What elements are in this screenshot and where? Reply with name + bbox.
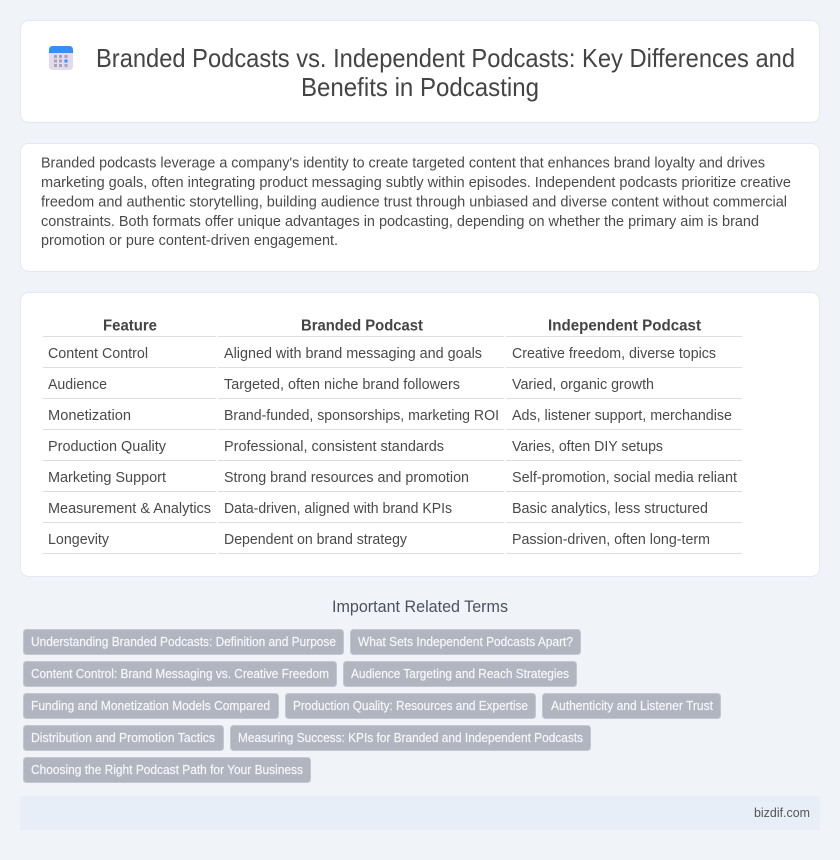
table row: monetization: Monetization xyxy=(48,408,131,424)
table row: content control: Content Control xyxy=(48,346,148,362)
tag: authenticity xyxy=(542,694,720,718)
table row: production quality: Professional, consistent standards xyxy=(224,439,444,455)
table row: production quality: Varies, often DIY setups xyxy=(512,439,663,455)
table row: content control: Creative freedom, diverse topics xyxy=(512,346,716,362)
table row: measurement and analytics: Measurement & Analytics xyxy=(48,501,211,517)
table row: longevity: Longevity xyxy=(48,532,110,548)
panel: title header xyxy=(20,20,820,122)
table row: measurement and analytics xyxy=(48,501,708,517)
tag: distribution xyxy=(24,726,224,750)
title: Benefits in Podcasting xyxy=(301,74,539,102)
footer xyxy=(20,796,820,830)
tag: independent podcasts: What Sets Independent Podcasts Apart? xyxy=(358,634,573,649)
tag: choosing the right path xyxy=(24,758,310,782)
text block: introduction paragraph: promotion or pure content-driven engagement. xyxy=(41,233,338,249)
text block: introduction paragraph: constraints. Both formats offer unique advantages in podcasting, depending on whether the primary aim is brand xyxy=(41,214,759,230)
table row: measurement and analytics: Basic analytics, less structured xyxy=(512,501,708,517)
tag: production quality xyxy=(286,694,536,718)
table row: marketing support xyxy=(48,470,737,486)
table row: audience: Audience xyxy=(48,377,107,393)
table header row: Branded Podcast xyxy=(301,318,424,334)
panel: comparison table xyxy=(20,292,820,576)
title: Branded Podcasts vs. Independent Podcasts: Key Differences and xyxy=(96,45,795,73)
table row: marketing support: Self-promotion, social media reliant xyxy=(512,470,737,486)
table row: audience xyxy=(48,377,654,393)
table row: marketing support: Strong brand resources and promotion xyxy=(224,470,469,486)
tag: funding and monetization: Funding and Monetization Models Compared xyxy=(31,698,270,713)
table row: content control: Aligned with brand messaging and goals xyxy=(224,346,482,362)
tag: production quality: Production Quality: Resources and Expertise xyxy=(293,698,528,713)
tag: understanding branded podcasts xyxy=(24,630,344,654)
panel: related term tags xyxy=(24,630,720,782)
table row: longevity: Dependent on brand strategy xyxy=(224,532,408,548)
tag: independent podcasts xyxy=(350,630,580,654)
text block: introduction paragraph: Branded podcasts leverage a company's identity to create targeted content that enhances brand loyalty and drives xyxy=(41,156,765,172)
tag: authenticity: Authenticity and Listener Trust xyxy=(551,698,713,713)
table row: monetization: Brand-funded, sponsorships, marketing ROI xyxy=(224,408,499,424)
heading: important related terms: Important Related Terms xyxy=(332,598,508,616)
tag: audience targeting xyxy=(344,662,576,686)
tag: content control: Content Control: Brand Messaging vs. Creative Freedom xyxy=(31,666,329,681)
table row: production quality: Production Quality xyxy=(48,439,167,455)
text block: introduction paragraph xyxy=(41,156,791,249)
panel: introduction xyxy=(20,144,820,272)
table header row: Independent Podcast xyxy=(548,318,702,334)
table header row: Feature xyxy=(103,318,157,334)
title xyxy=(96,45,795,102)
tag: measuring success: Measuring Success: KPIs for Branded and Independent Podcasts xyxy=(238,730,583,745)
table row: production quality xyxy=(48,439,663,455)
tag: distribution: Distribution and Promotion Tactics xyxy=(31,730,215,745)
table row: longevity xyxy=(48,532,710,548)
tag: content control xyxy=(24,662,336,686)
table row: longevity: Passion-driven, often long-term xyxy=(512,532,710,548)
icon: calendar xyxy=(49,46,73,70)
tag: measuring success xyxy=(230,726,590,750)
table row: content control xyxy=(48,346,716,362)
text block: introduction paragraph: marketing goals, often integrating product messaging subtly within episodes. Independent podcasts prioritize creative xyxy=(41,175,791,191)
tag: choosing the right path: Choosing the Right Podcast Path for Your Business xyxy=(31,762,303,777)
footer: bizdif.com xyxy=(754,805,810,820)
table row: marketing support: Marketing Support xyxy=(48,470,166,486)
tag: understanding branded podcasts: Understanding Branded Podcasts: Definition and Purpose xyxy=(31,634,336,649)
table row: audience: Varied, organic growth xyxy=(512,377,654,393)
table row: measurement and analytics: Data-driven, aligned with brand KPIs xyxy=(224,501,452,517)
table header row xyxy=(103,318,702,334)
table row: monetization: Ads, listener support, merchandise xyxy=(512,408,732,424)
tag: funding and monetization xyxy=(24,694,278,718)
table row: monetization xyxy=(48,408,732,424)
tag: audience targeting: Audience Targeting and Reach Strategies xyxy=(351,666,569,681)
text block: introduction paragraph: freedom and authentic storytelling, building audience trust through unbiased and diverse content without commercial xyxy=(41,194,787,210)
table row: audience: Targeted, often niche brand followers xyxy=(224,377,460,393)
